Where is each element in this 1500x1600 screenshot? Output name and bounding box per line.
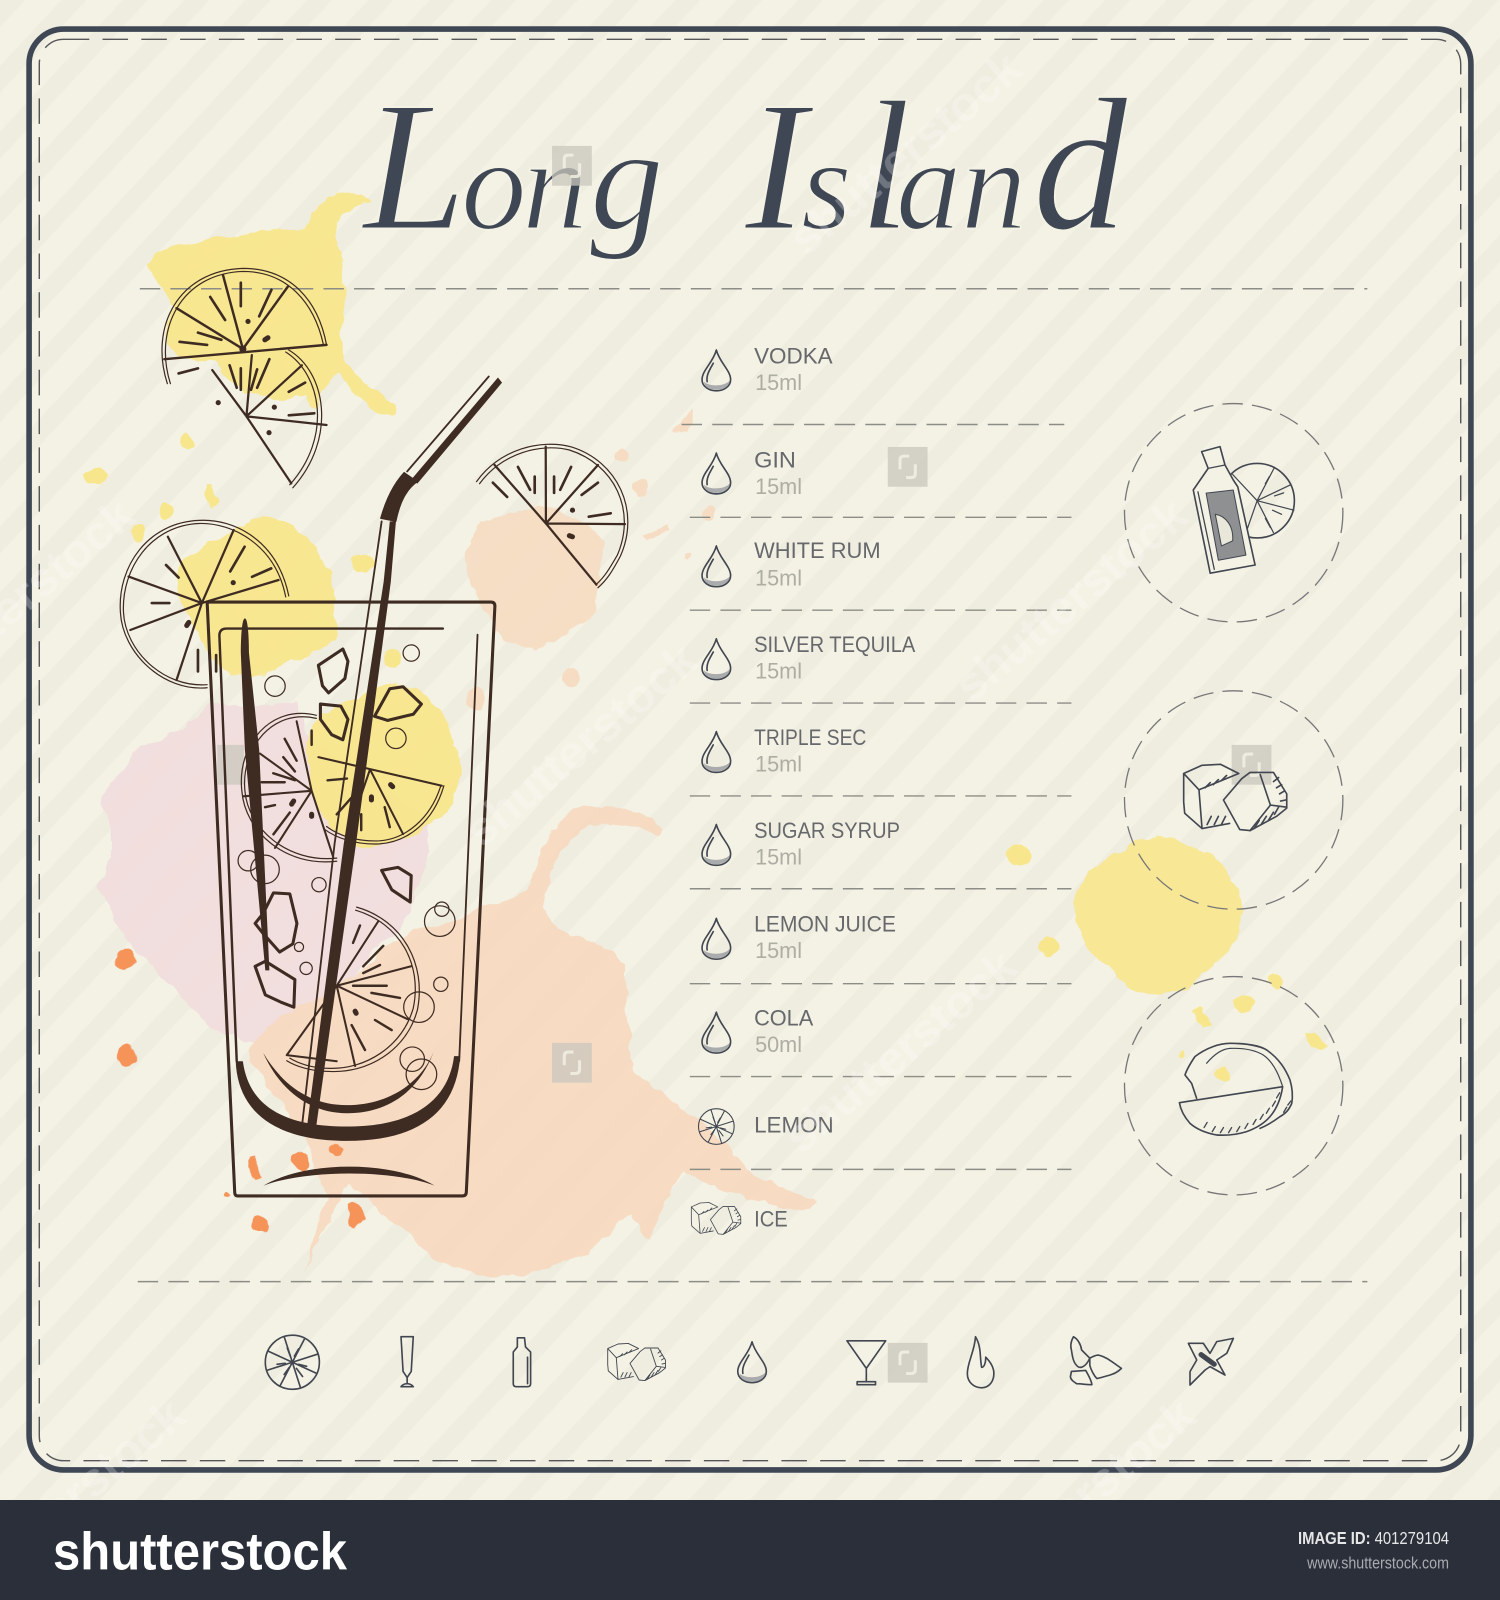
glass base highlight [263, 1167, 435, 1186]
splash: yellow top left [146, 194, 397, 414]
title: o [461, 114, 527, 258]
inner arc [263, 1052, 434, 1113]
ingredient: lemon: LEMON [754, 1113, 834, 1138]
splash dots [87, 408, 1327, 1232]
lemon slice: top half [162, 268, 327, 384]
divider top [140, 288, 1367, 290]
ingredient: cola: 50ml [755, 1032, 802, 1057]
title: n [961, 114, 1027, 258]
badge: ice cubes [1124, 691, 1343, 909]
ingredient: gin: GIN [754, 447, 796, 472]
watermark text: shutterstock [774, 939, 1027, 1163]
ingredient: sugar syrup [702, 818, 900, 869]
ingredient: lemon [698, 1109, 834, 1144]
watermark squares [217, 146, 1271, 1383]
ingredient: gin [702, 447, 802, 499]
lemon slice: lower in glass [287, 907, 419, 1072]
lemon slice: wedge below [212, 350, 327, 488]
inner thick bottom [236, 1056, 460, 1141]
title: l [859, 65, 911, 270]
ingredient: sugar syrup: SUGAR SYRUP [754, 818, 900, 843]
ingredient: gin: 15ml [755, 474, 802, 499]
watermark text [0, 41, 1206, 1600]
title: a [896, 114, 961, 258]
splash: yellow right [1073, 834, 1242, 994]
ice cubes [255, 649, 421, 1007]
bubbles [238, 645, 455, 1090]
title: n [522, 114, 588, 258]
glass [207, 377, 502, 1196]
inner glass wall [219, 629, 443, 1061]
splash: pink behind glass [99, 704, 429, 1046]
lemon slice: in glass left [241, 713, 337, 862]
ingredient: white rum [702, 538, 881, 591]
badge: bottle and lemon [1124, 404, 1343, 622]
ingredient: vodka [702, 343, 833, 395]
ingredient dividers [682, 424, 1071, 1169]
ingredient: ice [691, 1203, 788, 1234]
ingredient: lemon juice: LEMON JUICE [754, 912, 896, 937]
ingredient: sugar syrup: 15ml [755, 844, 802, 869]
ingredient: silver tequila: 15ml [755, 659, 802, 684]
ingredient: cola: COLA [754, 1006, 813, 1031]
ingredient: white rum: WHITE RUM [754, 538, 881, 563]
bottom icon: drop [738, 1342, 766, 1383]
bottom icon: ice cubes [608, 1343, 665, 1381]
title: d [1033, 61, 1129, 271]
title: g [590, 98, 664, 262]
black stirrer [241, 618, 269, 970]
lemon slice: in glass right [318, 757, 444, 844]
ingredient: triple sec: 15ml [755, 751, 802, 776]
bottom icon: martini [847, 1341, 886, 1385]
ingredient: triple sec [702, 725, 866, 776]
bottom icon: lemon wheel [265, 1335, 319, 1389]
splash: yellow behind rim lemon [177, 518, 337, 676]
ingredient: ice: ICE [754, 1207, 788, 1232]
ingredient: triple sec: TRIPLE SEC [754, 725, 866, 750]
watercolor splashes [87, 194, 1327, 1276]
bottom icon: flame [967, 1337, 994, 1388]
splash: yellow in glass [307, 686, 460, 847]
ingredient: silver tequila: SILVER TEQUILA [754, 632, 915, 657]
bottom icon: banana [1070, 1337, 1121, 1385]
ingredient: lemon juice [702, 912, 896, 963]
lemon slice: glass rim [120, 520, 289, 688]
bottom icon: champagne flute [401, 1337, 413, 1387]
title: s [801, 114, 852, 258]
bottom icon: mint [1188, 1338, 1233, 1385]
glass outline [207, 602, 495, 1196]
inner right wall [459, 635, 478, 1061]
footer url: www.shutterstock.com [1306, 1554, 1449, 1572]
watermark text: shutterstock [779, 41, 1032, 265]
straw [302, 377, 502, 1126]
ingredient: silver tequila [702, 632, 915, 684]
footer bar [0, 1500, 1500, 1600]
watermark text: shutterstock [455, 633, 708, 857]
watermark text: shutterstock [944, 488, 1197, 712]
ingredient: lemon juice: 15ml [755, 938, 802, 963]
title: I [744, 65, 815, 270]
splash: big peach [247, 807, 816, 1276]
badge: lemon halves [1124, 977, 1343, 1195]
footer logo: shutterstock [53, 1522, 347, 1581]
splash: peach behind wedge [464, 507, 602, 649]
bottom icon: shaker [513, 1338, 531, 1387]
ingredient: cola [702, 1006, 813, 1057]
lemon slice: right wedge [477, 444, 628, 588]
ingredient: white rum: 15ml [755, 566, 802, 591]
footer image id: IMAGE ID: 401279104 [1298, 1528, 1449, 1548]
ingredient: vodka: 15ml [755, 370, 802, 395]
ingredient: vodka: VODKA [754, 343, 833, 368]
title: L [360, 65, 467, 270]
divider bottom [138, 1281, 1367, 1283]
